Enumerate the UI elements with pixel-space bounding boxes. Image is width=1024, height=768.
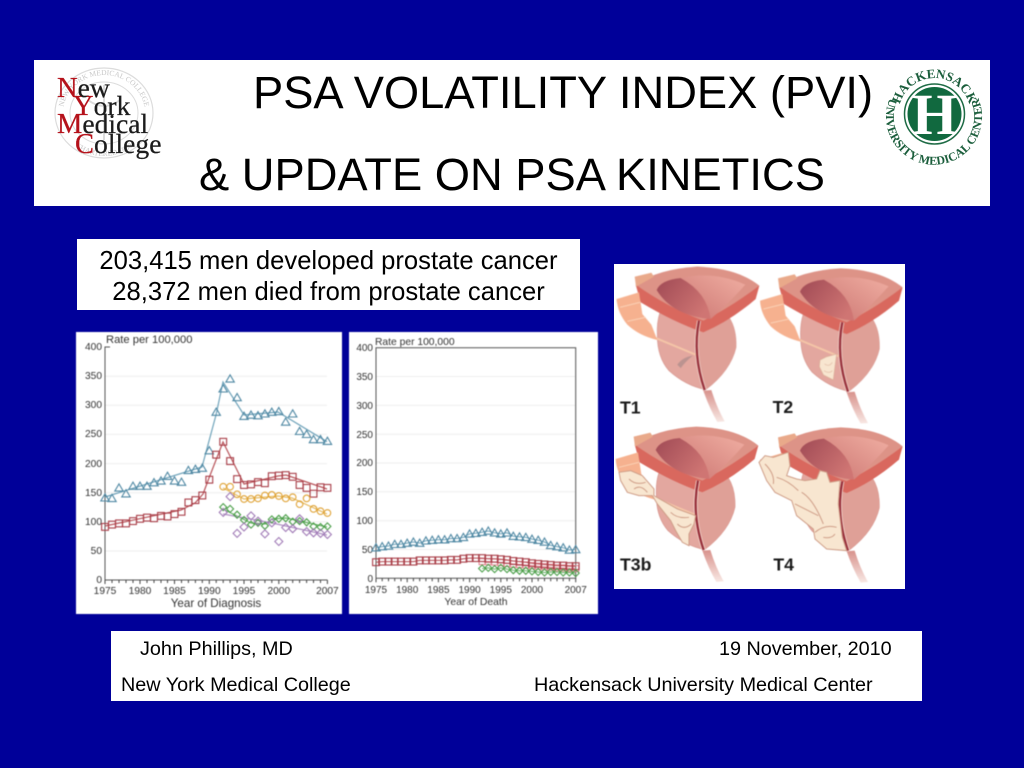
- y axis labels: [356, 343, 373, 585]
- label: T4: T4: [773, 555, 794, 575]
- logo: Hackensack University Medical Center: [886, 69, 982, 165]
- chart axis title: rate: Rate per 100,000: [106, 334, 192, 346]
- x axis labels: 2007: [316, 586, 339, 597]
- y axis labels: 0: [367, 574, 373, 585]
- chart axis title: rate: Rate per 100,000: [375, 337, 455, 348]
- statistic: men died from prostate cancer: 28,372 men died from prostate cancer: [112, 278, 545, 306]
- series: all races triangles: [376, 531, 576, 550]
- y axis labels: 200: [85, 459, 102, 470]
- y axis labels: 400: [85, 342, 102, 353]
- presenter name: John Phillips, MD: [140, 638, 293, 660]
- x axis labels: 1975: [365, 585, 388, 596]
- affiliation: Hackensack University Medical Center: Hackensack University Medical Center: [534, 674, 873, 696]
- seal date text: CHARTERED 1860: [79, 143, 132, 156]
- x axis title: Year of Death: [444, 597, 508, 608]
- label: T2: T2: [773, 397, 793, 417]
- y axis labels: 150: [85, 488, 102, 499]
- x axis labels: 1995: [490, 585, 512, 596]
- x axis labels: 1990: [458, 585, 481, 596]
- y axis labels: 350: [356, 372, 373, 383]
- label: T1: T1: [620, 398, 641, 418]
- series: green markers: [482, 568, 576, 573]
- illustration: stage T2: [760, 268, 903, 424]
- label: T3b: T3b: [620, 555, 652, 575]
- y axis labels: 400: [356, 343, 373, 354]
- ring text: HACKENSACK: [892, 69, 977, 104]
- x axis labels: 1995: [233, 586, 256, 597]
- y axis labels: 150: [356, 487, 373, 498]
- chart: incidence by year of diagnosis: [76, 332, 342, 614]
- presenter footer box: [111, 631, 922, 701]
- seal text: NEW YORK MEDICAL COLLEGE: [58, 70, 150, 107]
- seal: [55, 68, 153, 158]
- panel: prostate tumour stages: [614, 264, 905, 589]
- y axis labels: 100: [356, 516, 373, 527]
- trend lines: [105, 382, 327, 535]
- ring text lower: UNIVERSITY MEDICAL CENTER: [886, 98, 982, 165]
- x axis labels: 1980: [129, 586, 152, 597]
- series: red squares: [105, 442, 327, 527]
- y axis labels: 250: [85, 429, 102, 440]
- wordmark: New: [57, 72, 110, 104]
- y axis labels: 250: [356, 430, 373, 441]
- y axis labels: 300: [85, 400, 102, 411]
- y axis labels: 200: [356, 458, 373, 469]
- letter H: H: [912, 82, 957, 147]
- x axis labels: 1985: [163, 586, 186, 597]
- statistic: men developed prostate cancer: 203,415 men developed prostate cancer: [99, 247, 558, 275]
- illustration: stage T4: [759, 427, 903, 583]
- chart: mortality by year of death: [349, 332, 598, 614]
- x axis labels: [365, 585, 587, 596]
- y axis labels: 0: [96, 575, 102, 586]
- x axis labels: 2000: [521, 585, 544, 596]
- y axis labels: [85, 342, 102, 586]
- wordmark: Medical: [57, 108, 149, 140]
- title line 1: PSA VOLATILITY INDEX (PVI): [253, 67, 873, 118]
- wordmark: York: [73, 90, 131, 122]
- illustration: stage T1: [617, 267, 759, 422]
- date: 19 November, 2010: [719, 638, 892, 660]
- wordmark: College: [75, 128, 161, 160]
- series: red squares: [376, 558, 576, 566]
- y axis labels: 100: [85, 517, 102, 528]
- series: green markers: [223, 507, 327, 527]
- title line 2: & UPDATE ON PSA KINETICS: [199, 149, 825, 200]
- x axis labels: 1990: [198, 586, 221, 597]
- x axis labels: 2007: [565, 585, 587, 596]
- logo: New York Medical College: [54, 68, 161, 160]
- affiliation: New York Medical College: New York Medical College: [121, 674, 351, 696]
- header panel: [34, 60, 990, 206]
- y axis labels: 350: [85, 371, 102, 382]
- illustration: stage T3b: [616, 427, 758, 582]
- statistics box: [77, 239, 580, 310]
- x axis labels: 2000: [267, 586, 290, 597]
- series: orange circles: [223, 487, 327, 513]
- x axis labels: [94, 586, 339, 597]
- series: pink squares: [482, 562, 576, 569]
- series: purple diamonds: [223, 497, 327, 542]
- y axis labels: 50: [91, 546, 102, 557]
- y axis labels: 50: [362, 545, 373, 556]
- x axis labels: 1985: [427, 585, 450, 596]
- y axis labels: 300: [356, 401, 373, 412]
- wordmark: [57, 72, 161, 160]
- series: all races triangles: [105, 379, 327, 498]
- x axis labels: 1980: [396, 585, 419, 596]
- x axis title: Year of Diagnosis: [171, 597, 261, 610]
- x axis labels: 1975: [94, 586, 117, 597]
